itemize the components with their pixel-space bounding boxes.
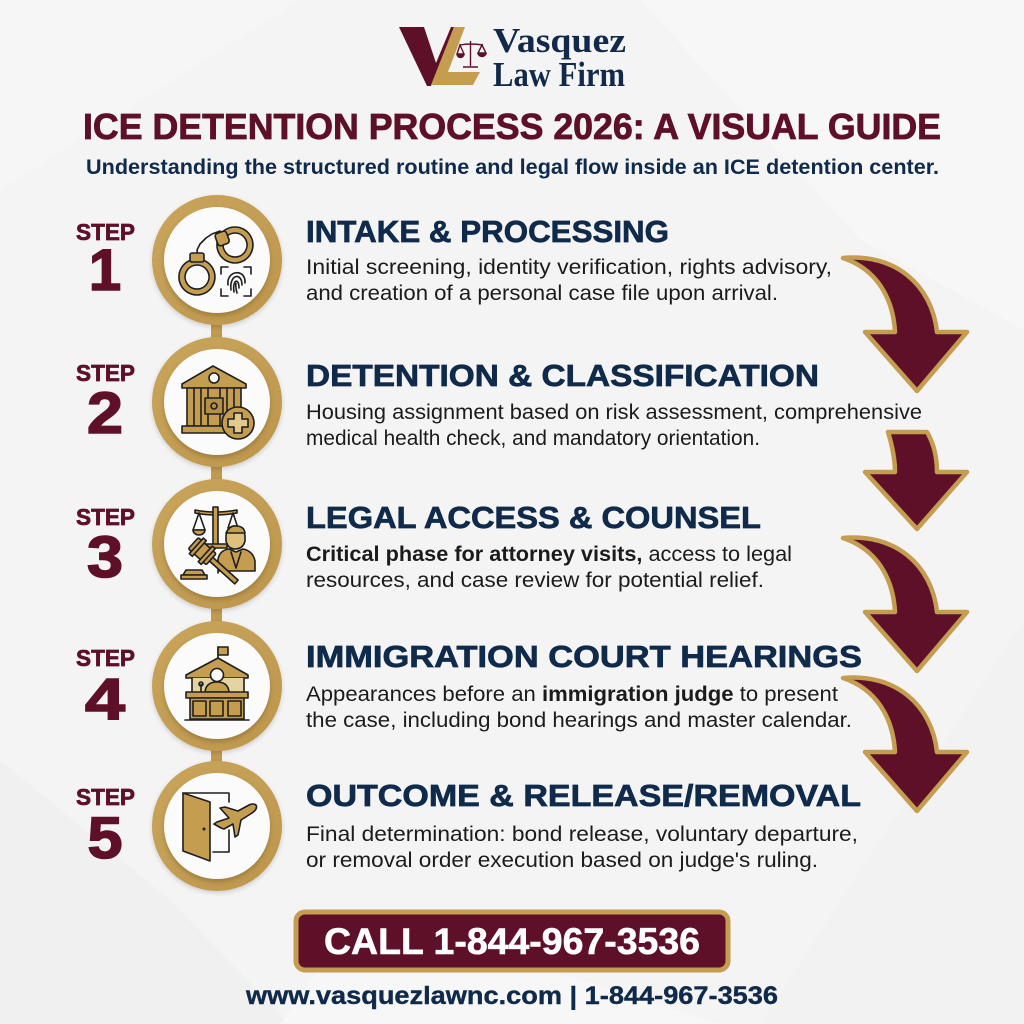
logo mark: L (431, 27, 480, 85)
step 1 label: STEP (76, 219, 135, 245)
call to action text: CALL 1-844-967-3536 (324, 921, 700, 962)
icon: detention building with medical cross (182, 366, 254, 439)
icon: courthouse with judge (185, 647, 249, 720)
logo wordmark: Law Firm (493, 55, 625, 94)
step 1 description: and creation of a personal case file upon arrival. (306, 281, 778, 305)
icon: handcuffs and fingerprint (179, 227, 253, 296)
step 1 description (306, 255, 832, 305)
step 3 ring (152, 479, 282, 609)
step 1 ring (152, 195, 282, 325)
logo wordmark: Vasquez (493, 21, 626, 60)
step 4 number: 4 (85, 667, 125, 732)
step 3 description: resources, and case review for potential relief. (306, 568, 764, 592)
step 3 description: Critical phase for attorney visits, access to legal (306, 542, 792, 566)
step 3 number: 3 (87, 525, 123, 590)
step 2 label: STEP (76, 360, 135, 386)
icon: exit door and airplane (183, 793, 256, 861)
step 4 ring (152, 621, 282, 751)
step 4 description: Appearances before an immigration judge to present (306, 682, 838, 706)
call to action button (296, 912, 728, 970)
step 5 heading: OUTCOME & RELEASE/REMOVAL (306, 778, 861, 813)
title: ICE DETENTION PROCESS 2026: A VISUAL GUIDE (83, 106, 941, 147)
panel: step 3 (76, 479, 792, 609)
step 5 label: STEP (76, 784, 135, 810)
panel: step 2 (76, 337, 922, 467)
step 3 heading: LEGAL ACCESS & COUNSEL (306, 500, 761, 535)
step 2 description: medical health check, and mandatory orientation. (306, 426, 760, 450)
step 4 label: STEP (76, 645, 135, 671)
arrow 2 (865, 432, 967, 529)
panel: step 4 (76, 621, 862, 751)
arrow 4 (843, 677, 967, 811)
step 2 heading: DETENTION & CLASSIFICATION (306, 358, 819, 393)
icon: logo scales (457, 41, 486, 67)
panel: step 1 (76, 195, 832, 325)
step 5 ring (152, 761, 282, 891)
timeline connectors (211, 320, 222, 769)
step 2 number: 2 (87, 381, 123, 446)
icon: scales, gavel and attorney (181, 507, 255, 590)
step 1 heading: INTAKE & PROCESSING (306, 214, 669, 249)
step 5 description (306, 822, 858, 872)
step 1 description: Initial screening, identity verification, rights advisory, (306, 255, 832, 279)
footer website and phone: www.vasquezlawnc.com | 1-844-967-3536 (245, 982, 778, 1010)
logo: Vasquez Law Firm (399, 21, 626, 94)
step 4 description: the case, including bond hearings and master calendar. (306, 708, 852, 732)
step 5 description: or removal order execution based on judge's ruling. (306, 848, 818, 872)
step 1 number: 1 (89, 238, 121, 303)
step 2 description (306, 400, 922, 450)
logo mark: V (399, 27, 454, 86)
step 2 description: Housing assignment based on risk assessment, comprehensive (306, 400, 922, 424)
step 4 description (306, 682, 852, 732)
step 4 heading: IMMIGRATION COURT HEARINGS (306, 639, 862, 674)
step 5 description: Final determination: bond release, voluntary departure, (306, 822, 858, 846)
step 3 label: STEP (76, 504, 135, 530)
step 3 description (306, 542, 792, 592)
arrow 1 (843, 257, 967, 391)
step 2 ring (152, 337, 282, 467)
step 5 number: 5 (88, 806, 122, 871)
arrow 3 (843, 537, 967, 671)
subtitle: Understanding the structured routine and legal flow inside an ICE detention center. (86, 156, 939, 179)
panel: step 5 (76, 761, 861, 891)
